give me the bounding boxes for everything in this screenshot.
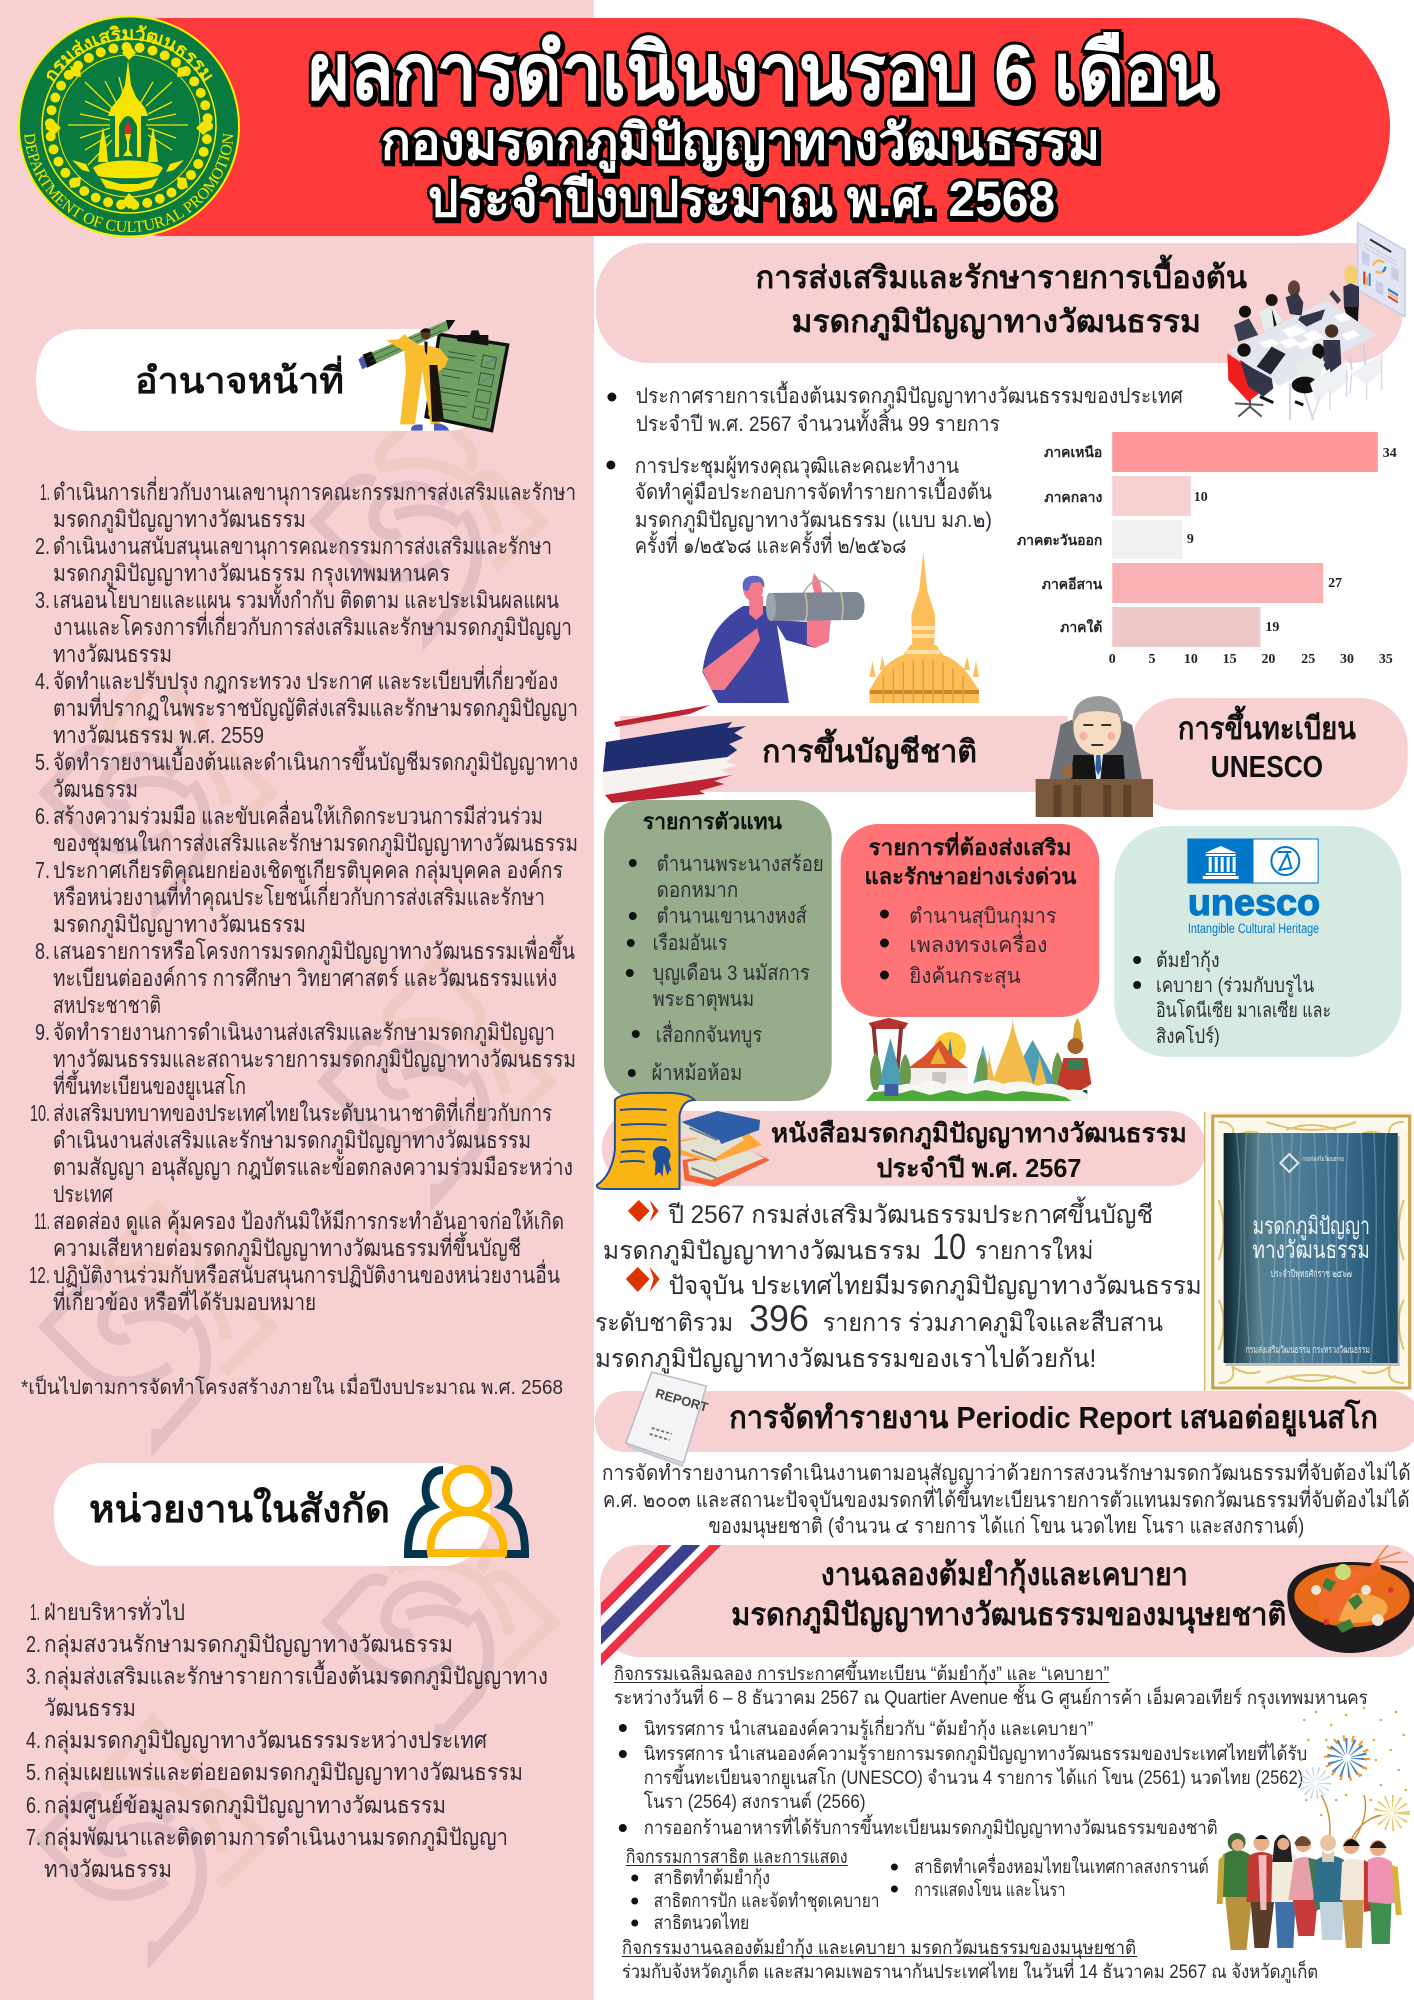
text: celebration activities: การออกร้านอาหารที่ได้รับการขึ้นทะเบียนมรดกภูมิปัญญาทางวัฒนธรรมของชาติ xyxy=(644,1814,1218,1839)
bar chart: regions: 30 xyxy=(1340,652,1354,667)
text: celebration activities: กิจกรรมการสาธิต และการแสดง xyxy=(626,1847,848,1868)
list: duties: ของชุมชนในการส่งเสริมและรักษามรดกภูมิปัญญาทางวัฒนธรรม xyxy=(53,830,578,857)
heading: powers and duties: อำนาจหน้าที่ xyxy=(135,355,344,401)
panel: representative list: เสื่อกกจันทบูร xyxy=(656,1020,762,1048)
list: duties: ตามที่ปรากฏในพระราชบัญญัติส่งเสริมและรักษามรดกภูมิปัญญา xyxy=(53,692,578,722)
heading: book panel xyxy=(602,1111,1206,1186)
book cover image: กรมส่งเสริมวัฒนธรรม xyxy=(1302,1155,1344,1163)
text: celebration activities: สาธิตทำต้มยำกุ้ง xyxy=(654,1868,770,1890)
icon: golden stupa xyxy=(870,552,979,703)
list: duties: 7. xyxy=(35,857,50,883)
list: duties: ทางวัฒนธรรม พ.ศ. 2559 xyxy=(53,722,264,748)
list: duties: ดำเนินการเกี่ยวกับงานเลขานุการคณะกรรมการส่งเสริมและรักษา xyxy=(53,476,576,506)
list: duties: ทะเบียนต่อองค์การ การศึกษา วิทยาศาสตร์ และวัฒนธรรมแห่ง xyxy=(53,965,557,991)
bar chart: regions: 25 xyxy=(1301,652,1315,667)
heading: festival xyxy=(600,1545,1414,1666)
list: duties: ประเทศ xyxy=(53,1181,113,1207)
list: duties: จัดทำและปรับปรุง กฎกระทรวง ประกาศ และระเบียบที่เกี่ยวข้อง xyxy=(53,665,558,695)
bar chart: regions: 15 xyxy=(1223,652,1237,667)
heading: UNESCO registration xyxy=(1131,698,1408,810)
icon: books xyxy=(681,1111,770,1187)
list: duties: มรดกภูมิปัญญาทางวัฒนธรรม xyxy=(53,911,306,938)
text: book statistics: ปี 2567 กรมส่งเสริมวัฒนธรรมประกาศขึ้นบัญชี xyxy=(668,1196,1153,1229)
text: celebration activities: สาธิตทำเครื่องหอมไทยในเทศกาลสงกรานต์ xyxy=(914,1853,1209,1878)
list: duties: ที่เกี่ยวข้อง หรือที่ได้รับมอบหมาย xyxy=(53,1286,316,1315)
heading: powers and duties xyxy=(36,329,485,431)
icon: report document xyxy=(626,1372,710,1466)
bar chart: regions: 10 xyxy=(1184,652,1198,667)
text: book statistics: 396 xyxy=(749,1298,809,1339)
list: duties: 2. xyxy=(35,533,50,559)
text: celebration activities: สาธิตการปัก และจัดทำชุดเคบายา xyxy=(654,1891,879,1913)
list: duties: 8. xyxy=(35,938,50,964)
header banner xyxy=(70,18,1390,236)
icon: unesco logo: unesco xyxy=(1188,882,1320,923)
panel: representative list: รายการตัวแทน xyxy=(643,809,782,834)
panel: urgent list: ตำนานสุบินกุมาร xyxy=(909,905,1057,929)
bullet points: inventory xyxy=(606,381,1184,558)
list: units: 7. xyxy=(26,1824,41,1850)
text: book statistics: ปัจจุบัน ประเทศไทยมีมรดกภูมิปัญญาทางวัฒนธรรม xyxy=(669,1271,1202,1301)
logo english text: DEPARTMENT OF CULTURAL PROMOTION xyxy=(24,132,234,232)
bar chart: regions: 10 xyxy=(1194,490,1208,505)
list: duties: มรดกภูมิปัญญาทางวัฒนธรรม xyxy=(53,506,306,533)
list: duties: ส่งเสริมบทบาทของประเทศไทยในระดับนานาชาติที่เกี่ยวกับการ xyxy=(53,1097,552,1126)
right column content xyxy=(595,381,1414,1983)
list: units: กลุ่มมรดกภูมิปัญญาทางวัฒนธรรมระหว่างประเทศ xyxy=(44,1727,487,1754)
bullet points: inventory: ประจำปี พ.ศ. 2567 จำนวนทั้งสิ้น 99 รายการ xyxy=(636,409,1000,436)
list: duties: หรือหน่วยงานที่ทำคุณประโยชน์เกี่ยวกับการส่งเสริมและรักษา xyxy=(53,881,545,911)
bar chart: regions: 0 xyxy=(1109,652,1116,667)
list: duties: 9. xyxy=(35,1019,50,1045)
bar chart: regions: 34 xyxy=(1383,446,1397,461)
panel: UNESCO list: ต้มยำกุ้ง xyxy=(1156,950,1220,973)
list: units: 3. xyxy=(26,1663,41,1689)
list: duties xyxy=(29,476,578,1315)
list: duties: 1. xyxy=(40,479,50,505)
list: units: 6. xyxy=(26,1792,41,1818)
bar chart: regions: 35 xyxy=(1379,652,1393,667)
bar chart: regions: 5 xyxy=(1149,652,1156,667)
panel: urgent list: และรักษาอย่างเร่งด่วน xyxy=(865,864,1076,889)
panel: UNESCO list xyxy=(1114,826,1402,1057)
list: duties: วัฒนธรรม xyxy=(53,776,138,802)
heading: national inventory: การขึ้นบัญชีชาติ xyxy=(762,728,977,770)
icon: department logo xyxy=(18,16,240,238)
logo text: กรมส่งเสริมวัฒนธรรม xyxy=(46,25,213,82)
bullet points: inventory: มรดกภูมิปัญญาทางวัฒนธรรม (แบบ มภ.๒) xyxy=(635,509,992,533)
list: duties: จัดทำรายงานการดำเนินงานส่งเสริมและรักษามรดกภูมิปัญญา xyxy=(53,1019,555,1046)
text: book statistics: มรดกภูมิปัญญาทางวัฒนธรรมของเราไปด้วยกัน! xyxy=(595,1344,1096,1374)
list: duties: ตามสัญญา อนุสัญญา กฎบัตรและข้อตกลงความร่วมมือระหว่าง xyxy=(53,1154,573,1181)
watermark pattern xyxy=(41,402,553,1955)
list: duties: ทางวัฒนธรรมและสถานะรายการมรดกภูมิปัญญาทางวัฒนธรรม xyxy=(53,1046,576,1073)
list: units: กลุ่มสงวนรักษามรดกภูมิปัญญาทางวัฒนธรรม xyxy=(44,1631,453,1658)
list: duties: สอดส่อง ดูแล คุ้มครอง ป้องกันมิให้มีการกระทำอันอาจก่อให้เกิด xyxy=(53,1208,564,1235)
text: celebration activities: การแสดงโขน และโนรา xyxy=(914,1879,1065,1901)
icon: judge xyxy=(1036,696,1153,817)
list: duties: สร้างความร่วมมือ และขับเคลื่อนให้เกิดกระบวนการมีส่วนร่วม xyxy=(53,800,543,829)
panel: urgent list xyxy=(841,824,1099,1017)
list: units xyxy=(26,1596,548,1882)
bullet points: inventory: ครั้งที่ ๑/๒๕๖๘ และครั้งที่ ๒/๒๕๖๘ xyxy=(635,531,906,558)
list: units: ทางวัฒนธรรม xyxy=(44,1856,172,1882)
heading: periodic report xyxy=(595,1391,1414,1452)
bar chart: regions: 19 xyxy=(1265,620,1279,635)
list: duties: งานและโครงการที่เกี่ยวกับการส่งเสริมและรักษามรดกภูมิปัญญา xyxy=(53,611,572,641)
text: celebration activities: สาธิตนวดไทย xyxy=(654,1912,749,1934)
icon: report document: REPORT xyxy=(654,1385,710,1415)
list: duties: 4. xyxy=(35,668,50,694)
bullet points: inventory: จัดทำคู่มือประกอบการจัดทำรายการเบื้องต้น xyxy=(635,477,992,505)
left panel background xyxy=(0,0,594,2000)
text: celebration activities: โนรา (2564) สงกรานต์ (2566) xyxy=(644,1791,866,1813)
list: duties: 3. xyxy=(35,587,50,613)
text: book statistics: มรดกภูมิปัญญาทางวัฒนธรรม xyxy=(603,1237,921,1266)
title line 1: ผลการดำเนินงานรอบ 6 เดือน xyxy=(308,28,1216,116)
panel: UNESCO list: เคบายา (ร่วมกับบรูไน xyxy=(1156,974,1314,998)
list: duties: 10. xyxy=(30,1100,50,1126)
list: duties: เสนอรายการหรือโครงการมรดกภูมิปัญญาทางวัฒนธรรมเพื่อขึ้น xyxy=(53,935,575,965)
icon: red diamond xyxy=(628,1200,659,1222)
bar chart: regions: 9 xyxy=(1187,532,1194,547)
panel: urgent list: ยิงค้นกระสุน xyxy=(909,965,1021,989)
list: units: กลุ่มส่งเสริมและรักษารายการเบื้องต้นมรดกภูมิปัญญาทาง xyxy=(44,1660,548,1690)
list: duties: เสนอนโยบายและแผน รวมทั้งกำกับ ติดตาม และประเมินผลแผน xyxy=(53,584,559,613)
list: duties: 6. xyxy=(35,803,50,829)
bar chart: regions: ภาคตะวันออก xyxy=(1017,533,1102,549)
bar chart: regions: 20 xyxy=(1261,652,1275,667)
heading: festival: มรดกภูมิปัญญาทางวัฒนธรรมของมนุษยชาติ xyxy=(731,1597,1286,1634)
text: periodic report description: ของมนุษยชาติ (จำนวน ๔ รายการ ได้แก่ โขน นวดไทย โนรา และสงกรานต์) xyxy=(708,1514,1304,1539)
text: book statistics: รายการใหม่ xyxy=(975,1236,1093,1265)
text: book statistics: รายการ ร่วมภาคภูมิใจและสืบสาน xyxy=(823,1308,1163,1338)
icon: scroll xyxy=(597,1093,694,1189)
text: celebration activities xyxy=(614,1660,1368,1983)
text: celebration activities: ร่วมกับจังหวัดภูเก็ต และสมาคมเพอรานากันประเทศไทย ในวันที่ 14 ธันวาคม 2567 ณ จังหวัดภูเก็ต xyxy=(622,1958,1318,1983)
text: book statistics: ระดับชาติรวม xyxy=(595,1309,733,1337)
panel: representative list: พระธาตุพนม xyxy=(653,988,754,1012)
heading: national inventory xyxy=(620,716,1067,792)
icon: thai landmarks illustration xyxy=(866,1018,1091,1101)
heading: periodic report: การจัดทำรายงาน Periodic Report เสนอต่อยูเนสโก xyxy=(729,1399,1378,1437)
book cover image xyxy=(1205,1112,1412,1393)
panel: representative list xyxy=(604,800,832,1101)
list: duties: ที่ขึ้นทะเบียนของยูเนสโก xyxy=(53,1070,246,1100)
list: duties: ความเสียหายต่อมรดกภูมิปัญญาทางวัฒนธรรมที่ขึ้นบัญชี xyxy=(53,1232,521,1262)
icon: thai flag brush xyxy=(603,705,746,803)
heading: book panel: ประจำปี พ.ศ. 2567 xyxy=(876,1154,1081,1183)
list: duties: ทางวัฒนธรรม xyxy=(53,641,172,667)
icon: tom yum bowl xyxy=(1287,1545,1414,1653)
text: book statistics: 10 xyxy=(932,1227,966,1267)
heading: UNESCO registration: UNESCO xyxy=(1211,749,1323,784)
list: units: วัฒนธรรม xyxy=(44,1695,136,1721)
panel: representative list: ผ้าหม้อห้อม xyxy=(652,1062,742,1085)
heading: book panel: หนังสือมรดกภูมิปัญญาทางวัฒนธรรม xyxy=(771,1119,1187,1150)
panel: inventory promotion heading xyxy=(596,243,1403,363)
heading: UNESCO registration: การขึ้นทะเบียน xyxy=(1178,705,1356,746)
panel: representative list: บุญเดือน 3 นมัสการ xyxy=(653,962,810,986)
list: duties: จัดทำรายงานเบื้องต้นและดำเนินการขึ้นบัญชีมรดกภูมิปัญญาทาง xyxy=(53,746,578,776)
list: duties: ประกาศเกียรติคุณยกย่องเชิดชูเกียรติบุคคล กลุ่มบุคคล องค์กร xyxy=(53,857,563,884)
text: periodic report description xyxy=(602,1458,1411,1539)
book cover image: มรดกภูมิปัญญา xyxy=(1253,1213,1370,1241)
panel: UNESCO list: อินโดนีเซีย มาเลเซีย และ xyxy=(1156,999,1331,1022)
bar chart: regions xyxy=(1017,432,1397,667)
list: duties: สหประชาชาติ xyxy=(53,992,161,1018)
list: duties: 11. xyxy=(34,1208,50,1234)
title line 3: ประจำปีงบประมาณ พ.ศ. 2568 xyxy=(428,171,1055,227)
bullet points: inventory: การประชุมผู้ทรงคุณวุฒิและคณะทำงาน xyxy=(635,455,959,479)
text: celebration activities: การขึ้นทะเบียนจากยูเนสโก (UNESCO) จำนวน 4 รายการ ได้แก่ โขน (2561) นวดไทย (2562) xyxy=(644,1764,1303,1789)
book cover image: ทางวัฒนธรรม xyxy=(1253,1237,1370,1264)
text: celebration activities: กิจกรรมงานฉลองต้มยำกุ้ง และเคบายา มรดกวัฒนธรรมของมนุษยชาติ xyxy=(622,1938,1136,1960)
icon: person with mat xyxy=(702,573,865,703)
list: units: ฝ่ายบริหารทั่วไป xyxy=(44,1596,185,1625)
text: celebration activities: นิทรรศการ นำเสนอองค์ความรู้รายการมรดกภูมิปัญญาทางวัฒนธรรมของประเทศไทยที่ได้รับ xyxy=(644,1740,1307,1765)
panel: representative list: เรือมอันเร xyxy=(653,932,727,955)
text: celebration activities: กิจกรรมเฉลิมฉลอง การประกาศขึ้นทะเบียน “ต้มยำกุ้ง” และ “เคบายา” xyxy=(614,1660,1109,1686)
list: units: 4. xyxy=(26,1727,41,1753)
bar chart: regions: ภาคเหนือ xyxy=(1044,445,1102,461)
heading: affiliated units: หน่วยงานในสังกัด xyxy=(89,1487,390,1531)
panel: inventory promotion heading: การส่งเสริมและรักษารายการเบื้องต้น xyxy=(756,254,1247,295)
heading: affiliated units xyxy=(54,1463,490,1566)
list: units: 5. xyxy=(26,1759,41,1785)
bullet points: inventory: ประกาศรายการเบื้องต้นมรดกภูมิปัญญาทางวัฒนธรรมของประเทศ xyxy=(636,381,1184,409)
icon: unesco logo: Intangible Cultural Heritage xyxy=(1188,920,1319,936)
panel: UNESCO list: สิงคโปร์) xyxy=(1156,1025,1220,1048)
title line 2: กองมรดกภูมิปัญญาทางวัฒนธรรม xyxy=(381,114,1100,173)
list: duties: ปฏิบัติงานร่วมกับหรือสนับสนุนการปฏิบัติงานของหน่วยงานอื่น xyxy=(53,1259,560,1289)
bar chart: regions: ภาคกลาง xyxy=(1044,491,1102,506)
list: duties: มรดกภูมิปัญญาทางวัฒนธรรม กรุงเทพมหานคร xyxy=(53,560,450,587)
panel: urgent list: รายการที่ต้องส่งเสริม xyxy=(869,831,1071,860)
list: duties: 5. xyxy=(35,749,50,775)
icon: unesco logo xyxy=(1188,839,1320,936)
list: duties: ดำเนินงานสนับสนุนเลขานุการคณะกรรมการส่งเสริมและรักษา xyxy=(53,533,552,560)
heading: festival: งานฉลองต้มยำกุ้งและเคบายา xyxy=(821,1557,1188,1594)
panel: urgent list: เพลงทรงเครื่อง xyxy=(909,930,1048,957)
icon: fireworks xyxy=(1301,1708,1406,1845)
bar chart: regions: ภาคอีสาน xyxy=(1042,577,1103,593)
icon: meeting illustration xyxy=(1227,223,1405,420)
bar chart: regions: ภาคใต้ xyxy=(1060,618,1102,636)
list: duties: ดำเนินงานส่งเสริมและรักษามรดกภูมิปัญญาทางวัฒนธรรม xyxy=(53,1127,531,1154)
list: duties: 12. xyxy=(29,1262,50,1288)
book cover image: ประจำปีพุทธศักราช ๒๕๖๗ xyxy=(1270,1268,1352,1280)
icon: people xyxy=(408,1469,525,1554)
list: units: กลุ่มเผยแพร่และต่อยอดมรดกภูมิปัญญาทางวัฒนธรรม xyxy=(44,1759,523,1786)
panel: inventory promotion heading: มรดกภูมิปัญญาทางวัฒนธรรม xyxy=(792,304,1201,341)
icon: women in kebaya xyxy=(1217,1833,1402,1950)
list: units: กลุ่มศูนย์ข้อมูลมรดกภูมิปัญญาทางวัฒนธรรม xyxy=(44,1792,446,1819)
panel: representative list: ตำนานเขานางหงส์ xyxy=(657,904,807,928)
text: book statistics xyxy=(595,1196,1202,1374)
panel: representative list: ตำนานพระนางสร้อย xyxy=(657,853,824,876)
bar chart: regions: 27 xyxy=(1328,576,1342,591)
icon: flag stripes xyxy=(601,1545,721,1666)
list: units: 2. xyxy=(26,1631,41,1657)
footnote: *เป็นไปตามการจัดทำโครงสร้างภายใน เมื่อปีงบประมาณ พ.ศ. 2568 xyxy=(21,1373,563,1399)
text: celebration activities: นิทรรศการ นำเสนอองค์ความรู้เกี่ยวกับ “ต้มยำกุ้ง และเคบายา” xyxy=(644,1715,1093,1741)
list: units: กลุ่มพัฒนาและติดตามการดำเนินงานมรดกภูมิปัญญา xyxy=(44,1824,508,1851)
list: units: 1. xyxy=(30,1599,40,1625)
icon: man with pencil and clipboard xyxy=(358,320,508,431)
panel: representative list: ดอกหมาก xyxy=(657,879,738,902)
